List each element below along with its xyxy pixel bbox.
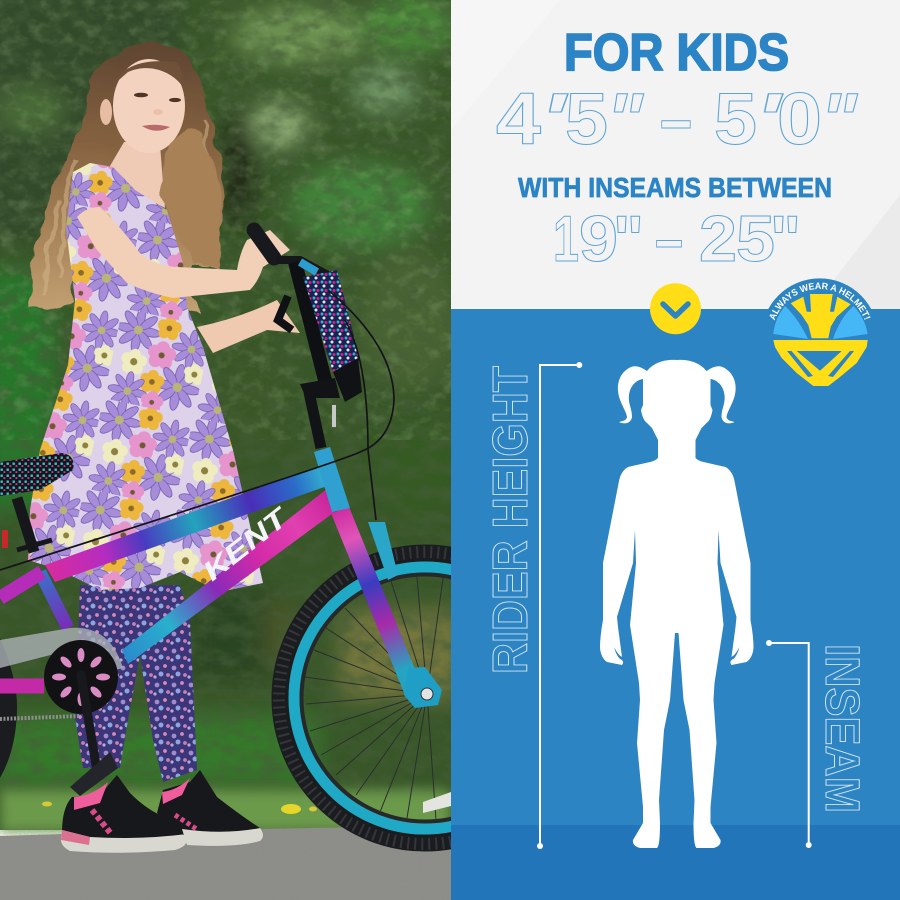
hair xyxy=(30,45,221,318)
dress xyxy=(28,163,263,592)
right arm xyxy=(197,300,300,353)
left arm xyxy=(77,207,290,298)
helmet strap xyxy=(773,340,868,386)
inseam range: 9 xyxy=(579,202,618,275)
helmet slogan: ALWAYS WEAR A HELMET! xyxy=(770,282,870,320)
inseam bracket xyxy=(766,640,812,848)
inseam range: 5 xyxy=(736,202,775,275)
grass strip xyxy=(0,790,451,832)
rider height range: " xyxy=(820,79,858,160)
seat xyxy=(0,453,74,496)
head tube xyxy=(314,447,350,512)
neck xyxy=(110,142,165,208)
inseam range: 1 xyxy=(553,202,579,275)
sprocket xyxy=(44,640,118,714)
inseam range: 2 xyxy=(699,202,737,275)
frame stays xyxy=(0,572,44,686)
rider height range: 5 xyxy=(565,79,608,160)
rider height range: " xyxy=(606,79,644,160)
subheading: with inseams between: WITH INSEAMS BETWEEN xyxy=(518,172,832,203)
helmet crown xyxy=(791,294,851,338)
top tube xyxy=(45,466,330,582)
rider height range: ' xyxy=(539,79,569,160)
icon: always wear a helmet badge xyxy=(768,278,872,386)
foliage background xyxy=(0,0,460,830)
rear wheel xyxy=(0,638,17,778)
seat tube xyxy=(40,572,68,628)
rider height bracket xyxy=(537,362,582,849)
rider height range: – xyxy=(660,79,692,160)
left shoe xyxy=(61,775,188,853)
inseam label: INSEAM xyxy=(815,644,868,813)
child silhouette xyxy=(600,360,754,848)
fork xyxy=(340,510,442,708)
chain guard xyxy=(0,628,123,672)
chain xyxy=(0,716,80,719)
crank and pedal xyxy=(70,675,118,796)
inseam range: " xyxy=(613,202,644,275)
icon: down chevron badge xyxy=(650,283,701,334)
helmet vent right xyxy=(833,306,868,339)
rider height range: 0 xyxy=(777,79,822,160)
photo panel: girl with bike xyxy=(0,0,571,900)
right shoe xyxy=(157,770,263,846)
info panel background xyxy=(451,0,900,900)
front hair lock xyxy=(160,127,219,265)
rider height label: RIDER HEIGHT xyxy=(484,366,538,674)
rider height range: 5 xyxy=(714,79,757,160)
stem xyxy=(300,378,340,448)
brand logo on frame: KENT xyxy=(197,501,296,587)
down tube xyxy=(122,488,340,664)
pavement xyxy=(0,826,451,900)
brake cables xyxy=(0,290,394,570)
handlebar and grip xyxy=(254,230,328,392)
seat post xyxy=(2,498,52,552)
rider height range xyxy=(496,79,858,160)
inseam range: " xyxy=(770,202,801,275)
face xyxy=(100,59,186,153)
inseam range: – xyxy=(655,202,683,275)
helmet vent left xyxy=(773,306,808,339)
front wheel xyxy=(279,552,571,844)
inseam range xyxy=(553,202,801,275)
rider height range: ' xyxy=(754,79,784,160)
sequin bag xyxy=(303,270,362,402)
heading: for kids: FOR KIDS xyxy=(564,24,789,82)
rider height range: 4 xyxy=(496,79,541,160)
leggings xyxy=(75,585,197,782)
